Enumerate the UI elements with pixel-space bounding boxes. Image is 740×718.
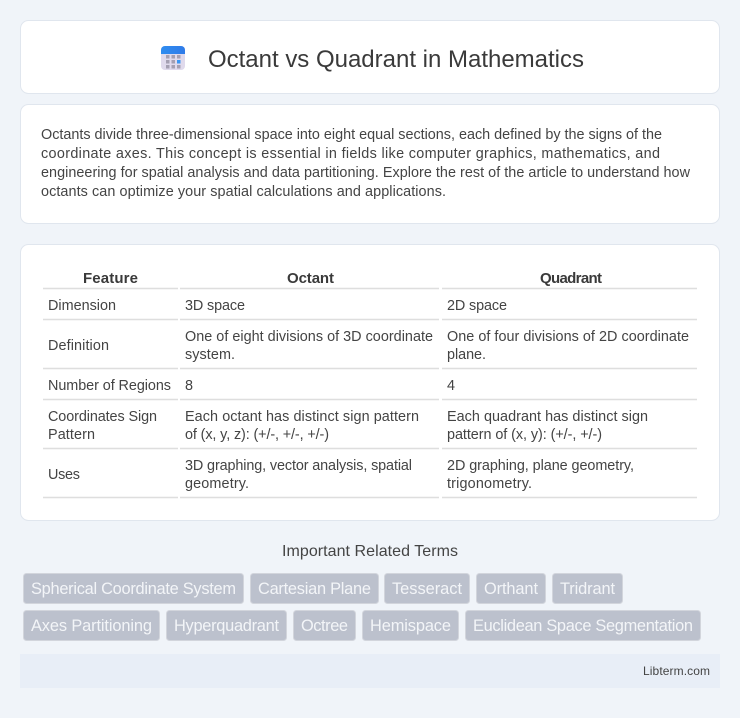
row: coordinates sign pattern: Each octant has distinct sign pattern	[185, 409, 419, 425]
intro text: coordinate axes. This concept is essential in fields like computer graphics, mathematics, and	[41, 146, 660, 162]
row: uses: geometry.	[185, 476, 249, 492]
related terms tags	[24, 574, 700, 640]
table header: Octant	[287, 270, 334, 287]
row: dimension: Dimension	[48, 298, 116, 314]
row: uses: trigonometry.	[447, 476, 532, 492]
intro text	[41, 127, 691, 200]
tag: Octree: Octree	[301, 617, 348, 635]
table header: Feature	[83, 270, 138, 287]
table header: Quadrant	[540, 270, 602, 287]
tag: Tesseract	[384, 574, 470, 604]
row: uses: 3D graphing, vector analysis, spatial	[185, 458, 412, 474]
tag: Cartesian Plane: Cartesian Plane	[258, 580, 371, 598]
row: coordinates sign pattern: Each quadrant has distinct sign	[447, 409, 648, 425]
tag: Spherical Coordinate System	[24, 574, 244, 604]
tag: Axes Partitioning	[24, 610, 160, 640]
footer	[20, 654, 720, 688]
row: definition: One of eight divisions of 3D coordinate	[185, 329, 433, 345]
tag: Orthant	[476, 574, 546, 604]
related terms heading: Important Related Terms	[282, 543, 458, 560]
row: definition: Definition	[48, 338, 109, 354]
row: coordinates sign pattern: of (x, y, z): (+/-, +/-, +/-)	[185, 427, 329, 443]
comparison table panel	[20, 244, 720, 520]
row: uses	[48, 458, 634, 492]
title: Octant vs Quadrant in Mathematics	[208, 46, 584, 73]
tag: Hyperquadrant: Hyperquadrant	[174, 617, 279, 635]
row: definition: system.	[185, 347, 235, 363]
tag: Tridrant	[552, 574, 622, 604]
table header	[83, 270, 602, 287]
tag: Tesseract: Tesseract	[392, 580, 462, 598]
row: dimension: 3D space	[185, 298, 245, 314]
row: coordinates sign pattern	[48, 409, 648, 443]
row: number of regions	[48, 378, 455, 394]
intro text: octants can optimize your spatial calculations and applications.	[41, 184, 446, 200]
tag: Tridrant: Tridrant	[560, 580, 615, 598]
row: number of regions: Number of Regions	[48, 378, 171, 394]
intro text: engineering for spatial analysis and data partitioning. Explore the rest of the article to understand how	[41, 165, 691, 181]
row: definition: One of four divisions of 2D coordinate	[447, 329, 689, 345]
icon: calendar	[161, 46, 185, 70]
row: definition	[48, 329, 689, 363]
row: uses: Uses	[48, 467, 80, 483]
row: dimension: 2D space	[447, 298, 507, 314]
tag: Hyperquadrant	[166, 610, 286, 640]
intro text: Octants divide three-dimensional space into eight equal sections, each defined by the signs of the	[41, 127, 662, 143]
row: dimension	[48, 298, 507, 314]
row: coordinates sign pattern: Pattern	[48, 427, 95, 443]
tag: Spherical Coordinate System: Spherical Coordinate System	[31, 580, 236, 598]
row: definition: plane.	[447, 347, 486, 363]
tag: Orthant: Orthant	[484, 580, 538, 598]
footer credit: Libterm.com	[643, 664, 710, 678]
tag: Hemispace: Hemispace	[370, 617, 451, 635]
row: number of regions: 8	[185, 378, 193, 394]
row: number of regions: 4	[447, 378, 455, 394]
tag: Euclidean Space Segmentation	[466, 610, 700, 640]
intro panel	[20, 104, 720, 224]
tag: Axes Partitioning: Axes Partitioning	[31, 617, 152, 635]
row: coordinates sign pattern: Coordinates Sign	[48, 409, 157, 425]
tag: Euclidean Space Segmentation: Euclidean Space Segmentation	[473, 617, 693, 635]
tag: Cartesian Plane	[250, 574, 378, 604]
row: uses: 2D graphing, plane geometry,	[447, 458, 634, 474]
row: coordinates sign pattern: pattern of (x, y): (+/-, +/-)	[447, 427, 602, 443]
tag: Octree	[294, 610, 356, 640]
tag: Hemispace	[362, 610, 458, 640]
header panel	[20, 20, 720, 94]
